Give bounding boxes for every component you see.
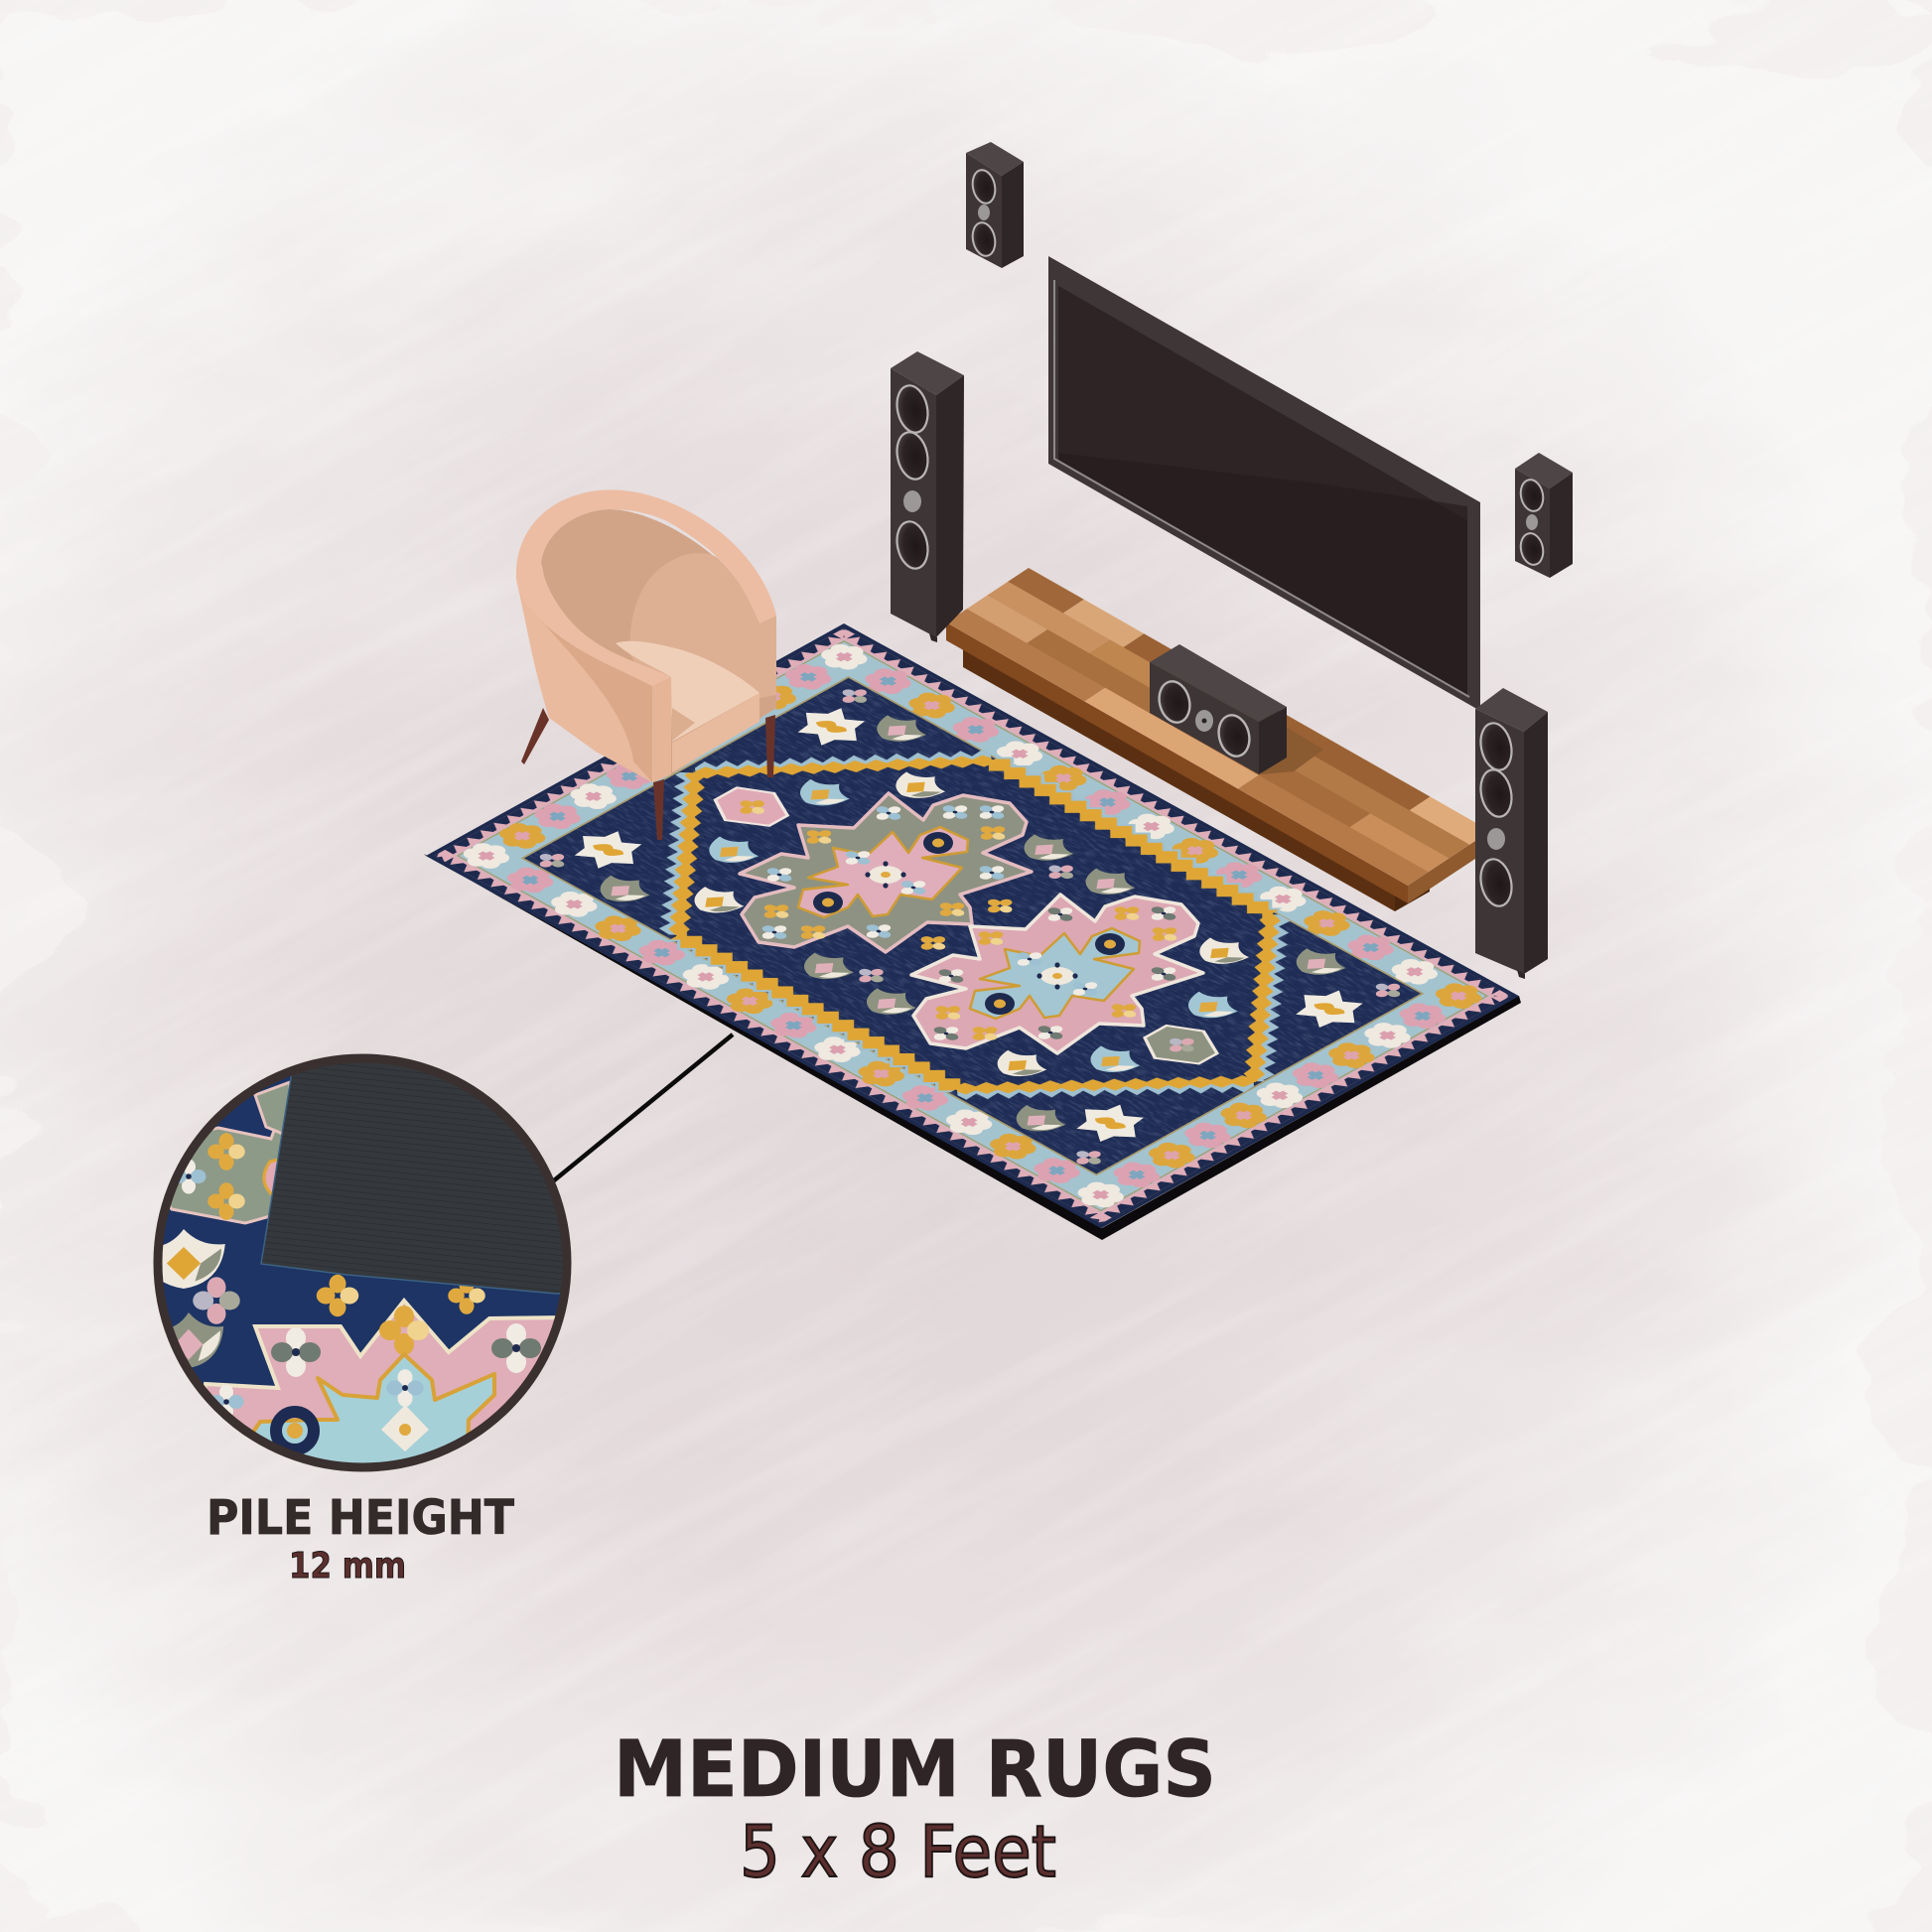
rug: isometric 5 x 8 medium rug — [424, 623, 1521, 1240]
inset ring — [158, 1058, 567, 1467]
chair lower shell — [516, 579, 776, 782]
subtitle: size: 5 x 8 Feet — [740, 1810, 1056, 1893]
centre motif — [381, 1405, 429, 1451]
connector line from rug to pile inset — [548, 1035, 733, 1185]
sage shield motif — [1132, 1018, 1230, 1073]
inset circle: pile height close-up — [153, 1054, 572, 1471]
screen glare — [1058, 286, 1467, 520]
rug outer edge — [426, 623, 1519, 1228]
navy field — [522, 677, 1423, 1174]
sage lobe — [170, 1126, 282, 1225]
speaker: left tower — [891, 351, 964, 642]
tv unit: wooden console — [946, 568, 1490, 911]
rug shadow edge — [424, 854, 1521, 1240]
title: MEDIUM RUGS — [614, 1725, 1216, 1815]
console plinth — [963, 645, 1395, 911]
inset rug detail — [163, 1062, 562, 1463]
chair arm front — [652, 677, 671, 782]
chair interior — [541, 509, 776, 774]
hexagon yellow zigzag frame — [524, 675, 1429, 1176]
border rosettes — [455, 639, 1490, 1212]
tv: wall mounted flat screen — [1048, 256, 1480, 711]
blue centre — [252, 1354, 496, 1463]
heading: pile height: PILE HEIGHT — [207, 1490, 514, 1546]
chair back arch — [630, 553, 776, 715]
speaker shadow on console — [1261, 728, 1323, 774]
hexagon outer blue teeth — [515, 671, 1438, 1180]
console slab front — [946, 622, 1408, 903]
tv frame line — [1054, 280, 1469, 697]
rug face — [426, 623, 1519, 1228]
chair legs — [521, 708, 549, 764]
speaker: right surround — [1515, 453, 1573, 578]
blue band — [453, 638, 1492, 1213]
value: 12 mm: 12 mm — [289, 1546, 406, 1587]
console end face — [1408, 831, 1490, 903]
chair front panel — [672, 693, 759, 772]
chair shell shadow swoop — [539, 619, 652, 782]
hexagon interior — [541, 685, 1413, 1167]
navy ring — [276, 1412, 314, 1449]
pink medallion — [911, 895, 1203, 1053]
speaker: right tower — [1475, 688, 1548, 979]
chair: blush tub armchair — [516, 489, 776, 840]
pink shield motif — [702, 780, 801, 835]
lotus left — [163, 1229, 225, 1289]
folded rug backing — [260, 1062, 562, 1295]
tv screen — [1058, 286, 1467, 695]
speaker: top left surround — [966, 142, 1024, 268]
green medallion — [740, 793, 1032, 952]
pink star — [203, 1297, 556, 1432]
field motifs — [631, 740, 1307, 1113]
pink tooth border — [434, 628, 1511, 1224]
console top planks — [946, 568, 1490, 886]
tv body — [1048, 256, 1480, 711]
chair seat shade — [672, 708, 695, 741]
corner motifs — [530, 683, 1411, 1170]
chair seat — [616, 641, 759, 742]
chair rim — [516, 489, 776, 686]
speaker: centre channel — [1150, 644, 1287, 774]
